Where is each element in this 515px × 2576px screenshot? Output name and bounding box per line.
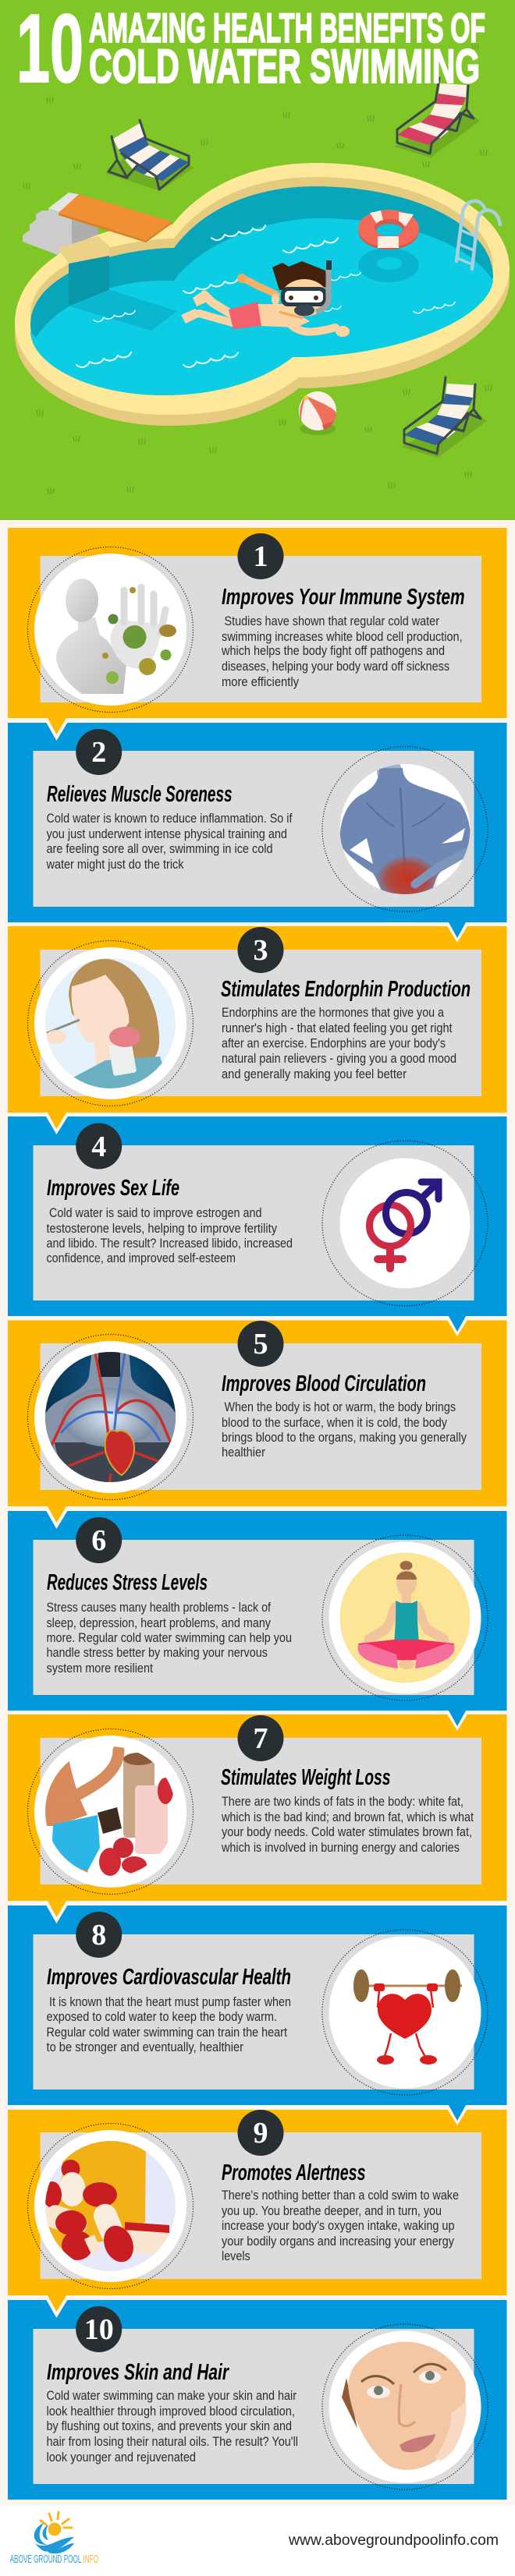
heading: Improves Skin and Hair [47,2360,229,2385]
number badge 3: 3 [253,934,268,967]
number badge 10 [76,2306,122,2352]
red deck chair top right [394,78,480,157]
heading: Reduces Stress Levels [47,1570,208,1595]
body text [221,614,463,689]
panel 3: endorphin production [8,922,507,1113]
icon: circulatory system [28,1335,194,1500]
body text: are feeling sore all over, swimming in ice cold [47,841,273,856]
panel 5: blood circulation [8,1316,507,1506]
heading: Improves Sex Life [47,1176,179,1201]
body text: handle stress better by making your nervous [47,1645,268,1660]
life ring [358,210,419,282]
body text: and libido. The result? Increased libido, increased [47,1236,293,1251]
body text: system more resilient [47,1661,153,1675]
body text: exposed to cold water to keep the body warm. [47,2009,277,2024]
icon: pills and bottle [28,2124,194,2289]
body text: which is involved in burning energy and calories [221,1840,460,1855]
number badge 6: 6 [91,1524,106,1557]
icon: sore back [322,747,488,912]
number badge 8: 8 [91,1919,106,1951]
blue deck chair top left [105,120,194,191]
body text: after an exercise. Endorphins are your body's [222,1035,446,1051]
diving board [59,194,172,242]
panel 10: skin and hair [8,2295,507,2500]
body text: natural pain relievers - giving you a good mood [222,1051,456,1066]
body text: to be stronger and eventually, healthier [47,2040,243,2054]
body text: Cold water is said to improve estrogen and [49,1205,262,1220]
body text [46,811,293,872]
body text: testosterone levels, helping to improve fertility [47,1221,277,1236]
panel 2: muscle soreness [8,718,507,922]
number badge 6 [76,1517,122,1563]
body text: runner's high - that elated feeling you get right [222,1021,453,1035]
body text: which is the bad kind; and brown fat, which is what [221,1810,474,1824]
icon: man blocking germs [28,547,194,713]
body text [47,1600,292,1675]
body text: Cold water swimming can make your skin and hair [47,2388,297,2403]
diving board steps [23,193,98,255]
number badge 1: 1 [253,540,268,573]
body text [222,1399,467,1460]
beach ball [299,391,336,435]
body text: look healthier through improved blood circulation, [47,2404,295,2419]
grass tufts [23,44,492,494]
icon: woman's face [322,2324,488,2489]
blue deck chair bottom right [401,377,487,458]
body text: look younger and rejuvenated [47,2450,196,2465]
heading: Improves Blood Circulation [222,1371,426,1396]
pool ladder [456,201,500,269]
swimmer [181,260,350,337]
heading: Promotes Alertness [222,2160,365,2185]
body text: more efficiently [222,674,299,689]
body text: levels [222,2249,250,2263]
body text [222,1005,456,1081]
body text [221,1794,474,1855]
body text: increase your body's oxygen intake, waking up [222,2218,454,2233]
body text: Endorphins are the hormones that give you a [222,1005,444,1020]
body text: swimming increases white blood cell production, [222,629,463,644]
body text: water might just do the trick [46,857,184,872]
body text [47,2388,298,2465]
body text: brings blood to the organs, making you generally [222,1430,467,1445]
body text: you up. You breathe deeper, and in turn, you [222,2203,442,2218]
heading: Improves Cardiovascular Health [47,1965,291,1990]
body text: confidence, and improved self-esteem [47,1251,236,1265]
icon: waist and shakes [28,1729,194,1895]
number badge 9 [237,2110,284,2156]
water ripples [76,225,455,367]
number badge 4 [76,1123,122,1169]
body text: by flushing out toxins, and prevents your skin and [47,2419,292,2433]
body text: Stress causes many health problems - lack of [47,1600,271,1615]
body text: diseases, helping your body ward off sickness [222,659,449,674]
number badge 5 [237,1321,284,1367]
body text: Regular cold water swimming can train the heart [47,2025,287,2040]
number badge 9: 9 [253,2117,268,2150]
body text: your body needs. Cold water stimulates brown fat, [222,1824,472,1839]
body text: hair from losing their natural oils. The result? You'll [47,2434,298,2449]
pool [15,163,510,426]
hero illustration: pool scene [0,0,515,520]
body text: and generally making you feel better [222,1067,407,1081]
number badge 1 [237,533,284,579]
body text: more. Regular cold water swimming can help you [47,1630,292,1645]
body text: blood to the surface, when it is cold, the body [222,1415,447,1430]
logo text: ABOVE GROUND POOL INFO [10,2553,98,2566]
icon: woman eating [28,940,194,1107]
heading: Stimulates Weight Loss [221,1765,390,1790]
number badge 3 [237,927,284,973]
panel 9: alertness [8,2105,507,2295]
title [16,0,485,103]
body text [222,2188,459,2263]
body text [47,1205,293,1265]
body text: It is known that the heart must pump faster when [49,1994,291,2009]
number badge 8 [76,1912,122,1958]
website url: www.abovegroundpoolinfo.com [288,2532,499,2549]
panel 8: cardiovascular health [8,1901,507,2105]
icon: gender symbols [322,1141,488,1306]
panel 1: immune system [8,528,507,718]
body text: your bodily organs and increasing your energy [222,2234,454,2249]
body text: When the body is hot or warm, the body brings [225,1399,456,1414]
number badge 4: 4 [91,1131,106,1163]
panel 6: stress levels [8,1506,507,1711]
body text: There's nothing better than a cold swim to wake [222,2188,459,2203]
number badge 10: 10 [84,2313,114,2346]
number badge 5: 5 [253,1328,268,1361]
number badge 7: 7 [253,1722,268,1755]
number badge 2: 2 [91,736,106,769]
icon: logo [34,2512,74,2553]
body text: Studies have shown that regular cold water [225,614,439,628]
body text: which helps the body fight off pathogens and [221,643,445,658]
heading: Relieves Muscle Soreness [47,782,233,807]
icon: meditating woman [322,1535,488,1700]
footer [0,2505,515,2576]
body text: Cold water is known to reduce inflammation. So if [47,811,293,826]
panel 7: weight loss [8,1711,507,1901]
body text: There are two kinds of fats in the body: white fat, [222,1794,464,1809]
number badge 2 [76,729,122,775]
body text: you just underwent intense physical training and [47,826,287,841]
body text [47,1994,291,2054]
body text: sleep, depression, heart problems, and many [47,1615,271,1630]
body text: healthier [222,1445,265,1460]
panel 4: sex life [8,1113,507,1316]
icon: heart lifting barbell [322,1930,488,2095]
number badge 7 [237,1715,284,1761]
